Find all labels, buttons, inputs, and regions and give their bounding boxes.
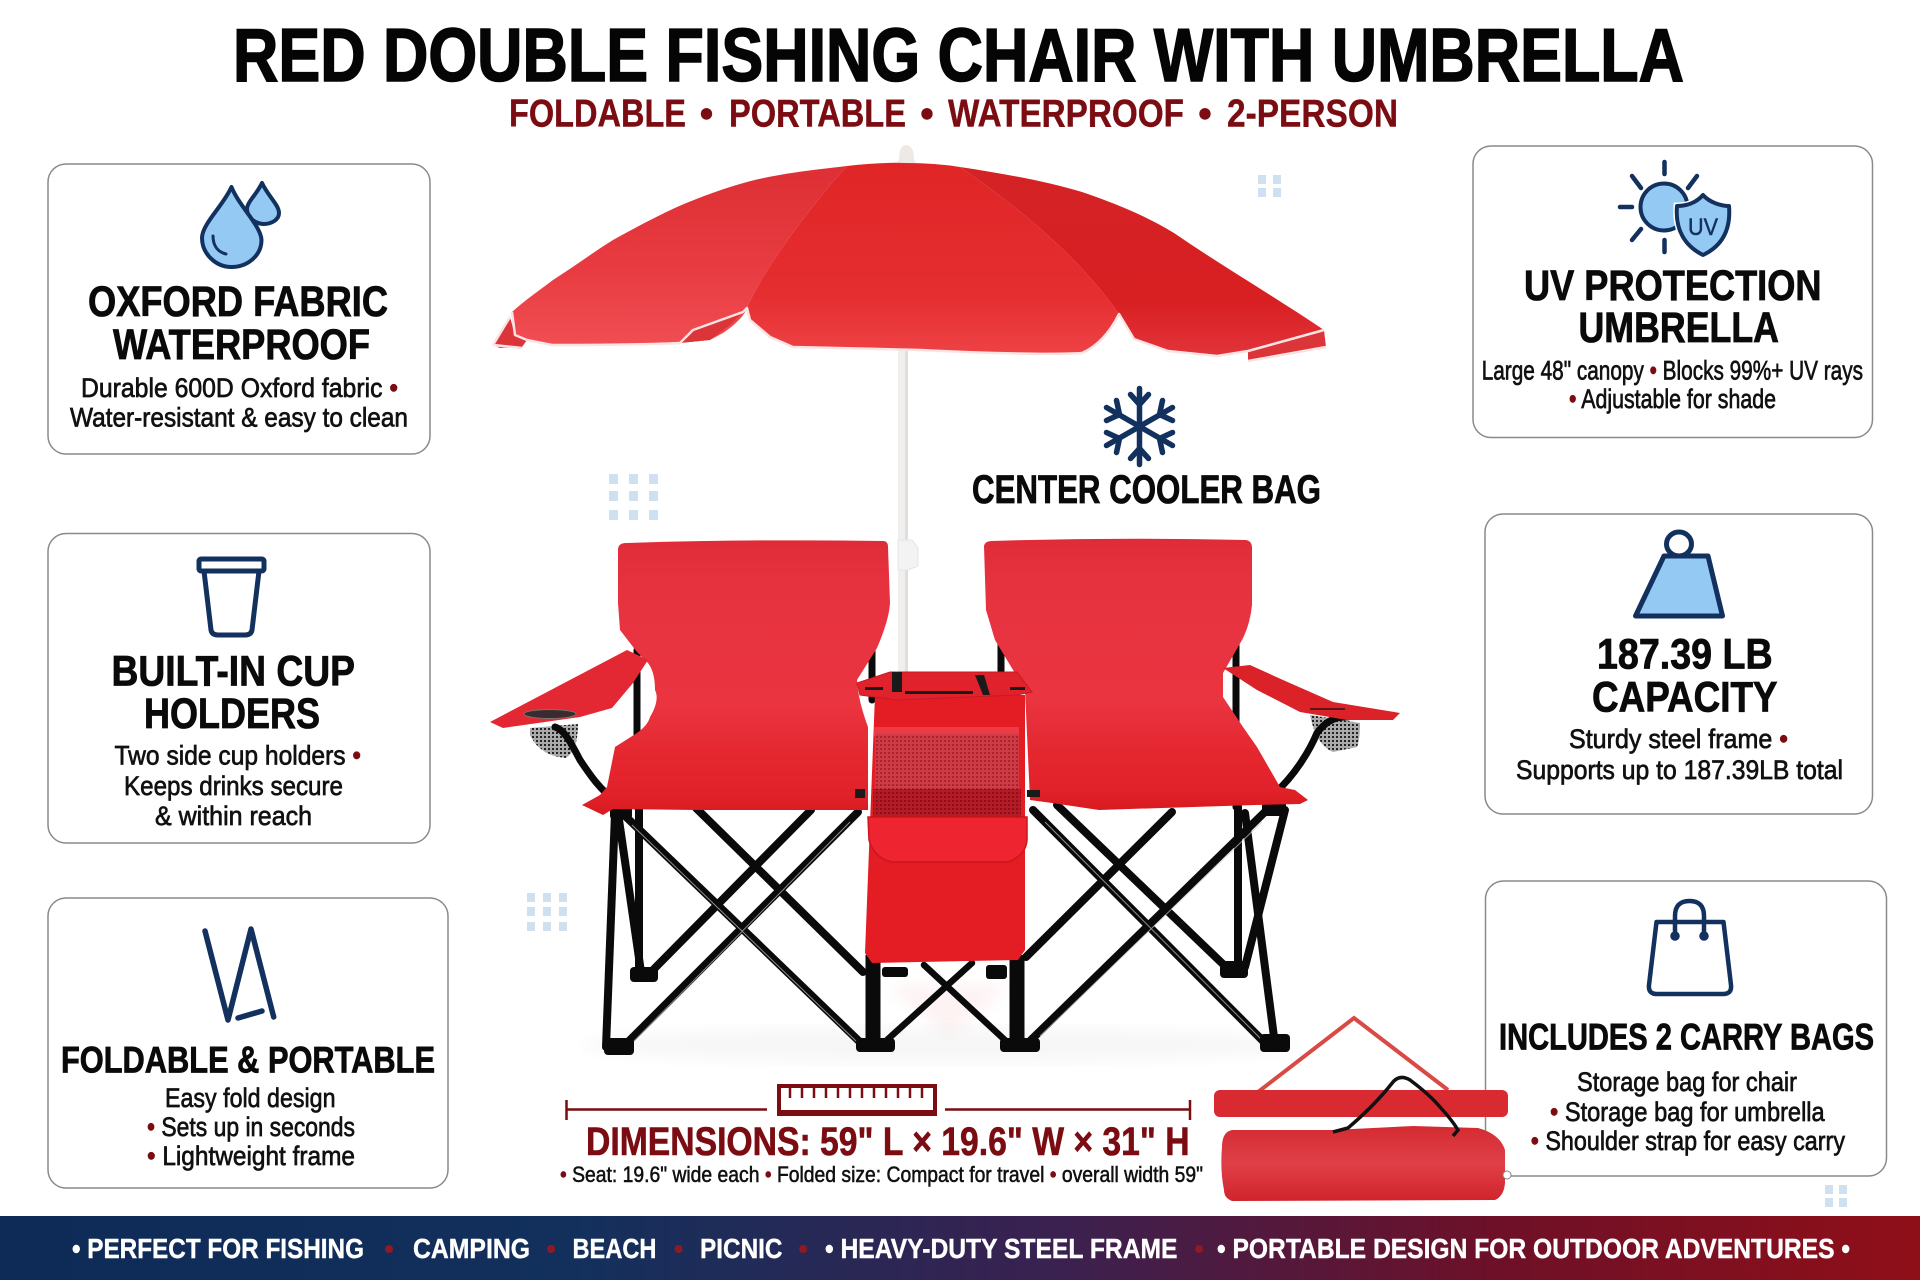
icon: weight [1636, 532, 1722, 616]
bottom banner [0, 1216, 1920, 1280]
panel: uv protection [1473, 146, 1872, 438]
panel: oxford fabric [48, 164, 430, 454]
dimension line [566, 1100, 1190, 1120]
heading: FOLDABLE & PORTABLE [61, 1040, 435, 1081]
icon: folded frame [205, 929, 274, 1020]
title: RED DOUBLE FISHING CHAIR WITH UMBRELLA [233, 13, 1684, 97]
panel box [1485, 514, 1872, 814]
floor shadow [580, 985, 1300, 1063]
banner items [72, 1233, 1850, 1264]
description: Durable 600D Oxford fabric • [81, 373, 398, 403]
canopy right panel [960, 167, 1324, 356]
description: Sturdy steel frame • [1569, 724, 1788, 754]
snowflake icon [1106, 388, 1172, 464]
subtitle: 2-PERSON [1227, 92, 1398, 136]
description: Large 48" canopy • Blocks 99%+ UV rays [1482, 356, 1863, 386]
cooler lid [857, 672, 1032, 700]
description [114, 740, 361, 831]
frame arm uprights [555, 717, 1348, 803]
canopy center panel [747, 163, 1119, 354]
canopy left panel [512, 166, 847, 345]
panel: capacity [1485, 514, 1872, 814]
chair bag [1221, 1126, 1505, 1201]
heading: UMBRELLA [1578, 305, 1779, 352]
shoulder strap [1333, 1077, 1458, 1136]
icon: water drops [202, 183, 279, 267]
description: • Adjustable for shade [1569, 384, 1776, 414]
description [1531, 1067, 1845, 1156]
panel box [48, 534, 430, 843]
banner items: PICNIC [700, 1233, 782, 1264]
subtitle: • [700, 93, 713, 136]
panel box [48, 164, 430, 454]
left armrest [490, 650, 648, 728]
heading [1524, 263, 1822, 352]
icon: cup [199, 559, 264, 635]
description: • Lightweight frame [147, 1141, 355, 1171]
cooler straps and zip [855, 672, 1040, 798]
subtitle: PORTABLE [729, 92, 906, 136]
description: & within reach [155, 801, 312, 831]
heading [88, 279, 388, 369]
description: • Sets up in seconds [147, 1112, 355, 1142]
right chair fabric [984, 539, 1308, 810]
subtitle: WATERPROOF [948, 92, 1184, 136]
canopy white hem [493, 308, 1326, 361]
frame feet [604, 802, 1290, 1055]
heading: HOLDERS [144, 691, 320, 738]
dimensions text: DIMENSIONS: 59" L × 19.6" W × 31" H [586, 1120, 1190, 1164]
dimensions [560, 1086, 1203, 1187]
banner items: • HEAVY-DUTY STEEL FRAME [825, 1233, 1178, 1264]
cup holder meshes [530, 715, 1360, 758]
subtitle [509, 92, 1398, 136]
banner items: • PERFECT FOR FISHING [72, 1233, 364, 1264]
description: Storage bag for chair [1577, 1067, 1797, 1097]
umbrella bag [1214, 1090, 1508, 1117]
icon: sun and shield [1620, 162, 1729, 255]
heading: 187.39 LB [1597, 632, 1773, 679]
description [70, 373, 408, 432]
front flap [868, 817, 1027, 862]
description: • Storage bag for umbrella [1550, 1097, 1826, 1127]
double chair [490, 539, 1400, 1063]
banner items: BEACH [572, 1233, 656, 1264]
umbrella canopy [493, 163, 1326, 361]
umbrella finial [896, 145, 917, 164]
icon: shopping bag [1649, 901, 1731, 994]
description [1516, 724, 1843, 785]
heading: WATERPROOF [113, 322, 370, 369]
heading [112, 649, 355, 738]
ruler icon [779, 1086, 935, 1114]
heading: CAPACITY [1592, 674, 1778, 721]
description: Easy fold design [165, 1083, 336, 1113]
umbrella bag strap [1258, 1018, 1448, 1092]
cooler bag label: CENTER COOLER BAG [972, 468, 1321, 512]
banner background [0, 1216, 1920, 1280]
description: Keeps drinks secure [124, 771, 343, 801]
subtitle: FOLDABLE [509, 92, 686, 136]
panel: carry bags [1486, 881, 1886, 1176]
center cooler bag [855, 672, 1040, 963]
panel box [48, 898, 448, 1188]
canopy folded edges [493, 312, 1326, 361]
carry bags [1214, 1018, 1511, 1201]
panel: cup holders [48, 534, 430, 843]
cooler body [865, 695, 1025, 963]
banner separators [385, 1245, 1203, 1253]
umbrella pole [898, 350, 918, 680]
steel frame legs [606, 640, 1285, 1047]
cooler front band [874, 727, 1019, 736]
icon: sun and shield: UV [1688, 214, 1718, 241]
bag ring [1503, 1171, 1511, 1179]
seat and folded size note: • Seat: 19.6" wide each • Folded size: Compact for travel • overall width 59" [560, 1162, 1203, 1187]
description [147, 1083, 355, 1171]
subtitle: • [1198, 93, 1212, 136]
heading: OXFORD FABRIC [88, 279, 388, 326]
description: Supports up to 187.39LB total [1516, 755, 1843, 785]
description: Water-resistant & easy to clean [70, 402, 408, 432]
mesh pocket [873, 734, 1021, 817]
banner items: • PORTABLE DESIGN FOR OUTDOOR ADVENTURES • [1217, 1233, 1850, 1264]
umbrella [493, 145, 1326, 680]
panel box [1473, 146, 1872, 438]
heading: UV PROTECTION [1524, 263, 1822, 310]
banner items: CAMPING [413, 1233, 530, 1264]
description: • Shoulder strap for easy carry [1531, 1126, 1845, 1156]
right armrest [1223, 665, 1400, 720]
subtitle: • [920, 93, 934, 136]
description: Two side cup holders • [114, 740, 361, 770]
description [1482, 356, 1863, 414]
heading [1592, 632, 1778, 721]
panel: foldable [48, 898, 448, 1188]
heading: BUILT-IN CUP [112, 649, 355, 696]
left chair fabric [582, 540, 890, 815]
panel box [1486, 881, 1886, 1176]
